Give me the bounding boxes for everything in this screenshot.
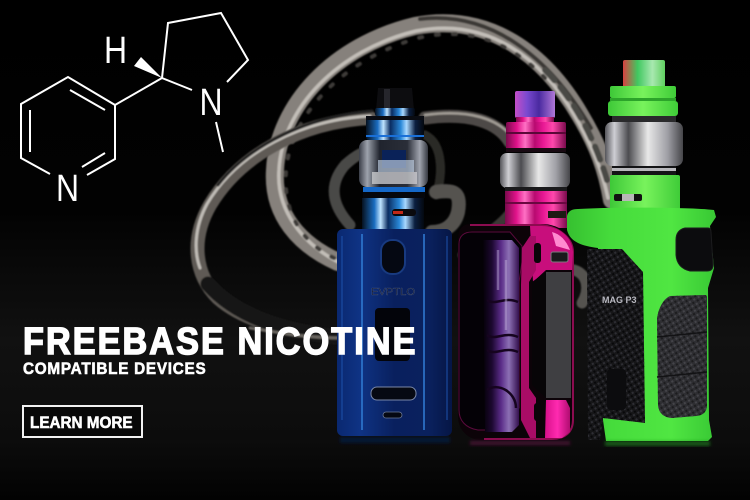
blue screen window — [375, 308, 410, 361]
pink grey side panel — [546, 272, 571, 398]
green dark left carbon panel — [587, 249, 645, 440]
front cable loop — [196, 111, 512, 338]
pyrrolidine ring — [162, 13, 248, 90]
blue mod body — [337, 229, 452, 436]
green tank — [605, 86, 683, 211]
atom labels: H — [104, 29, 127, 72]
pink lower corner — [545, 400, 570, 438]
pink fire button — [551, 252, 568, 262]
pink mod body — [458, 224, 574, 440]
pink resin panel — [459, 232, 522, 430]
blue usb port — [383, 412, 402, 418]
green fire button — [676, 228, 713, 271]
blue fire slot — [381, 240, 405, 274]
headline: FREEBASE NICOTINE — [23, 319, 415, 362]
back cable loop — [275, 18, 612, 262]
green usb cover — [607, 369, 626, 410]
wedge bond — [134, 57, 162, 78]
coiled cables — [196, 18, 612, 338]
green mod body — [567, 208, 716, 441]
connecting bond — [115, 78, 162, 105]
atom labels: N — [200, 81, 223, 124]
blue device — [337, 88, 452, 436]
model label: MAG P3 — [602, 295, 637, 305]
learn more button: LEARN MORE — [30, 413, 133, 432]
inner cable coil — [334, 135, 587, 303]
nicotine molecule diagram — [21, 13, 248, 210]
blue tank — [359, 108, 428, 229]
methyl bond — [216, 122, 223, 152]
pink tank — [500, 117, 570, 228]
subheading: COMPATIBLE DEVICES — [23, 359, 206, 378]
pink device — [458, 91, 574, 440]
blue drip tip — [376, 88, 414, 110]
atom labels — [56, 29, 223, 210]
floor reflection — [340, 437, 710, 446]
learn more button — [23, 406, 142, 437]
blue brand mark: EVPTLO — [371, 287, 415, 298]
green device — [567, 60, 716, 441]
atom labels: N — [56, 167, 79, 210]
green drip tip — [623, 60, 665, 88]
blue adjust button — [371, 387, 416, 400]
pink drip tip — [515, 91, 555, 118]
carbon grip — [657, 295, 707, 418]
pyridine ring — [21, 77, 115, 175]
